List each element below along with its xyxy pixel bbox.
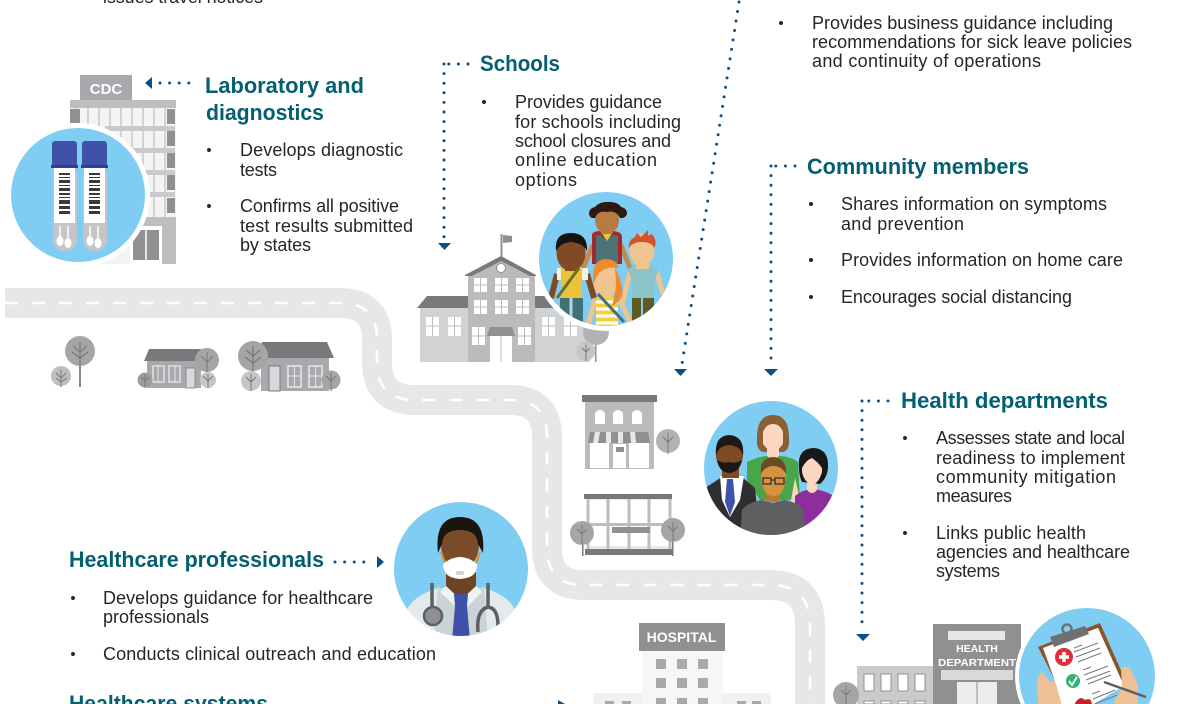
small house (138, 348, 219, 388)
woman with brown hair (747, 415, 800, 506)
panel: businesses: Provides business guidance including (812, 13, 1113, 33)
panel: health departments (901, 388, 1130, 581)
heading: laboratory and diagnostics: Laboratory and (205, 73, 364, 98)
arrow: community members (764, 166, 795, 376)
text: laboratory bullets: tests (240, 160, 277, 180)
panel: businesses (779, 13, 1132, 71)
shop building (582, 395, 680, 469)
text: schools bullets (482, 92, 681, 190)
heading: laboratory and diagnostics (205, 73, 364, 125)
text: healthcare professionals bullets (71, 588, 436, 664)
icon: schoolchildren (534, 187, 678, 331)
icon: test tubes (6, 123, 150, 267)
text: schools bullets: Provides guidance (515, 92, 662, 112)
arrow: healthcare systems (558, 700, 565, 704)
panel: laboratory and diagnostics (205, 73, 413, 255)
text: community bullets: Encourages social distancing (841, 287, 1072, 307)
text: schools bullets: for schools including (515, 112, 681, 132)
right boy (622, 230, 663, 328)
heading: laboratory and diagnostics: diagnostics (206, 100, 324, 125)
panel: schools (480, 51, 681, 190)
text: healthcare professionals bullets: professionals (103, 607, 209, 627)
panel: community members (807, 154, 1123, 307)
text: laboratory bullets (207, 140, 413, 255)
trees beside road (51, 336, 95, 387)
text: health department bullets: agencies and healthcare (936, 542, 1130, 562)
road (5, 303, 810, 704)
text: schools bullets: options (515, 170, 577, 190)
text: health department bullets: community mitigation (936, 467, 1116, 487)
heading: health departments: Health departments (901, 388, 1108, 413)
large house (238, 341, 340, 391)
text: schools bullets: online education (515, 150, 657, 170)
man with glasses (740, 457, 806, 540)
health department building (833, 624, 1021, 704)
text: laboratory bullets: Develops diagnostic (240, 140, 403, 160)
health department building: DEPARTMENT (938, 657, 1017, 669)
school building (417, 234, 609, 362)
CDC building: CDC (90, 81, 122, 98)
storefront building (570, 494, 685, 556)
panel: businesses: recommendations for sick leave policies (812, 32, 1132, 52)
text: community bullets (809, 194, 1123, 307)
text: health department bullets: measures (936, 486, 1012, 506)
heading: community members: Community members (807, 154, 1029, 179)
text: health department bullets (903, 428, 1130, 581)
woman with black hair (795, 448, 832, 530)
front girl (588, 259, 630, 329)
hospital building: HOSPITAL (647, 629, 717, 645)
icon: doctor with mask (394, 502, 528, 640)
text: healthcare professionals bullets: Conducts clinical outreach and education (103, 644, 436, 664)
man in suit (705, 435, 760, 535)
arrow: health departments (856, 401, 888, 641)
arrow: businesses (674, 2, 739, 376)
arrow: schools (438, 64, 468, 250)
text: laboratory bullets: Confirms all positive (240, 196, 399, 216)
CDC building (70, 75, 176, 264)
text: health department bullets: Links public health (936, 523, 1086, 543)
text: community bullets: Shares information on symptoms (841, 194, 1107, 214)
panel: healthcare professionals (69, 547, 436, 664)
text: health department bullets: Assesses state and local (936, 428, 1125, 448)
hospital building (593, 623, 771, 704)
left boy (551, 233, 594, 328)
heading: healthcare professionals: Healthcare professionals (69, 547, 324, 572)
back girl (583, 202, 630, 268)
arrow: laboratory (145, 77, 196, 89)
text: laboratory bullets: by states (240, 235, 311, 255)
text: community bullets: and prevention (841, 214, 964, 234)
text: health department bullets: readiness to implement (936, 448, 1125, 468)
text: health department bullets: systems (936, 561, 1000, 581)
arrow: healthcare professionals (335, 556, 384, 568)
icon: clipboard checklist (1015, 604, 1159, 704)
text: schools bullets: school closures and (515, 131, 671, 151)
icon: community members (704, 401, 838, 540)
heading: schools: Schools (480, 51, 560, 76)
text: healthcare professionals bullets: Develops guidance for healthcare (103, 588, 373, 608)
text: laboratory bullets: test results submitted (240, 216, 413, 236)
text: community bullets: Provides information on home care (841, 250, 1123, 270)
panel: businesses: and continuity of operations (812, 51, 1041, 71)
health department building: HEALTH (956, 643, 998, 655)
